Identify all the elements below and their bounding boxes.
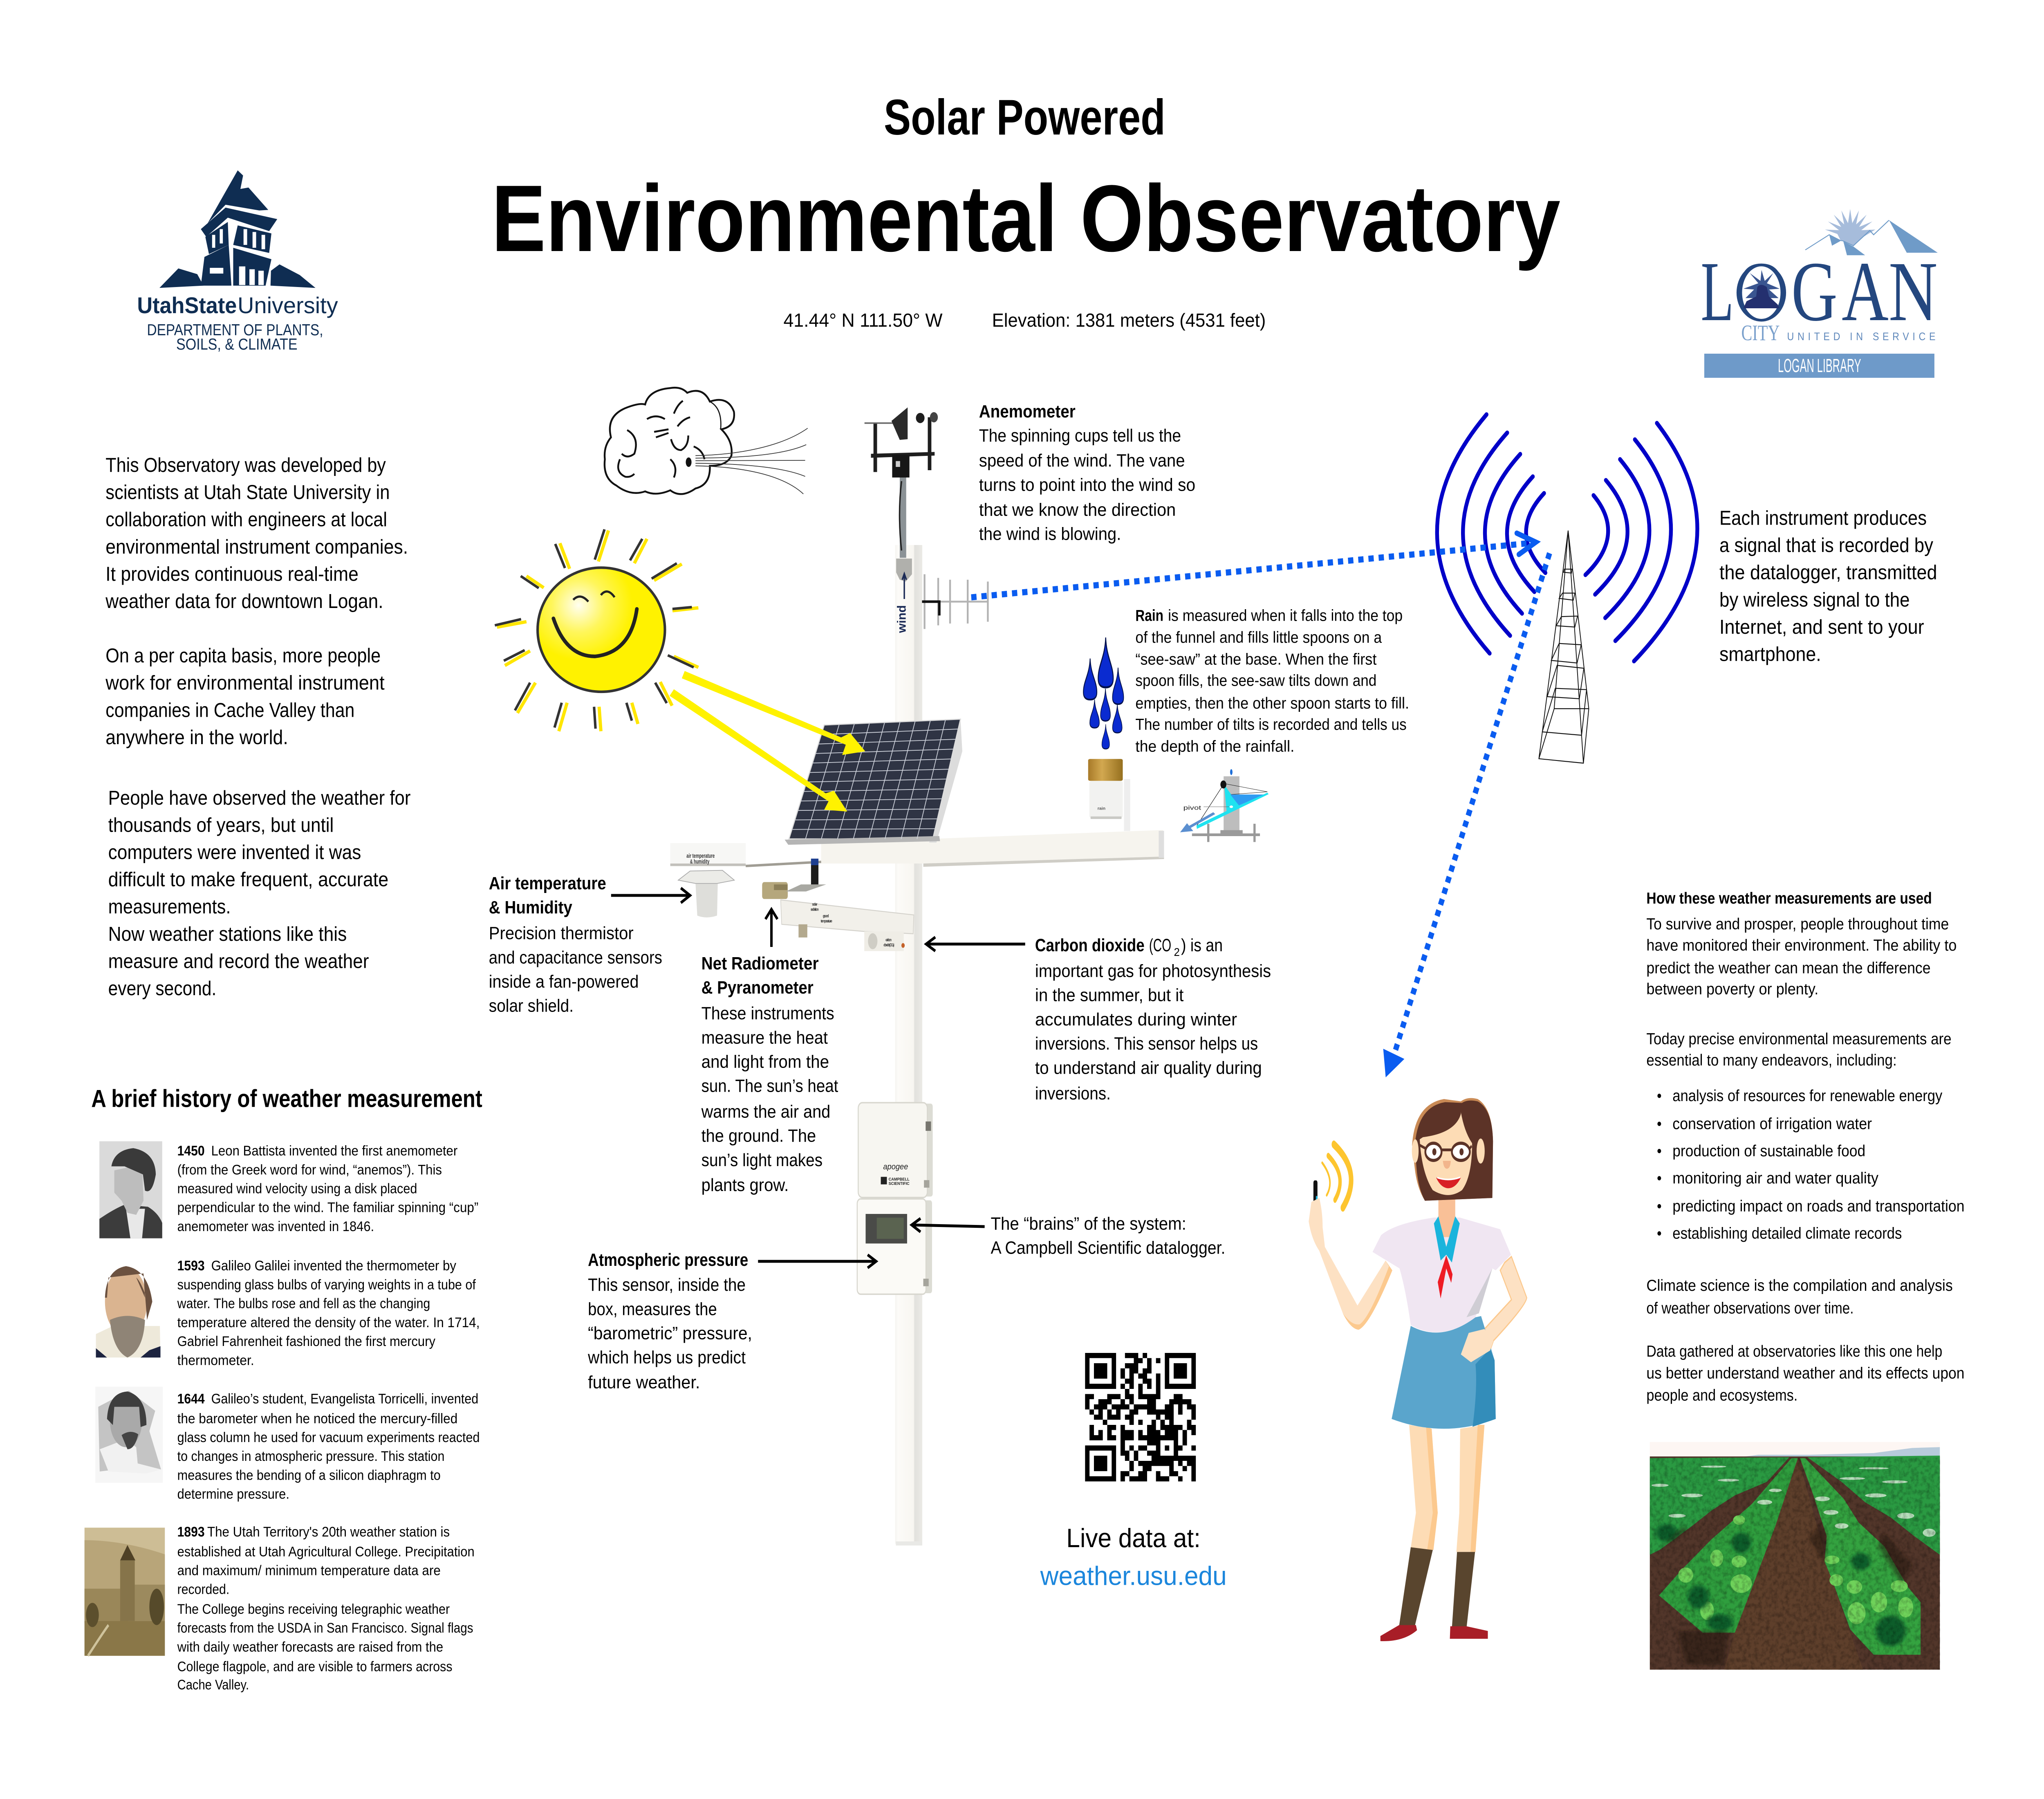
rain gauge: rain <box>1098 806 1105 811</box>
bulleted list: conservation of irrigation water <box>1672 1115 1872 1133</box>
label: anemometer: Anemometer <box>979 401 1076 422</box>
history entry 1644: to changes in atmospheric pressure. This station <box>177 1448 444 1464</box>
label: air temperature and humidity <box>489 873 662 1016</box>
history entry 1593: Gabriel Fahrenheit fashioned the first mercury <box>177 1333 435 1349</box>
icon: Old Main tower <box>159 170 316 288</box>
label: anemometer: speed of the wind. The vane <box>979 451 1185 471</box>
text block: climate science: of weather observations over time. <box>1646 1299 1853 1317</box>
bulleted list: predicting impact on roads and transportation <box>1672 1197 1965 1215</box>
history entry 1893: College flagpole, and are visible to farmers across <box>177 1658 453 1674</box>
label: rain: is measured when it falls into the top <box>1168 606 1403 624</box>
label: carbon dioxide: ) is an <box>1181 935 1223 955</box>
figure: girl with smartphone <box>1309 1098 1527 1641</box>
bulleted list: analysis of resources for renewable energy <box>1672 1087 1943 1104</box>
text block: observing the weather: every second. <box>108 977 216 1000</box>
portrait: Galileo <box>96 1266 161 1357</box>
logo wordmark LOGAN <box>1701 245 1938 339</box>
coordinates and elevation: Elevation: 1381 meters (4531 feet) <box>992 310 1266 331</box>
arrows: sunlight to panel <box>670 671 865 812</box>
enclosures <box>857 1103 933 1294</box>
logo text CITY: CITY <box>1741 321 1780 345</box>
label: signal explanation <box>1719 507 1937 665</box>
label: net radiometer and pyranometer: plants grow. <box>702 1175 789 1195</box>
live data link <box>1040 1523 1227 1590</box>
dotted arrow: tower to phone <box>1383 553 1550 1077</box>
bulleted list: • <box>1657 1087 1662 1104</box>
logo wordmark LOGAN: O <box>1737 245 1786 339</box>
callout arrows <box>611 888 1025 1268</box>
label: anemometer: that we know the direction <box>979 500 1176 520</box>
label: carbon dioxide: (CO <box>1149 935 1171 955</box>
phone signal waves <box>1322 1144 1351 1208</box>
anemometer and wind vane <box>865 407 938 581</box>
label: signal explanation: a signal that is recorded by <box>1719 534 1933 556</box>
net radiometer and pyranometer <box>762 859 914 938</box>
history entry 1450 <box>177 1143 478 1234</box>
text block: climate science: people and ecosystems. <box>1646 1386 1797 1404</box>
history entry 1644: glass column he used for vacuum experiments reacted <box>177 1429 480 1445</box>
arrow: datalogger <box>912 1218 985 1232</box>
text block: observatory intro <box>105 454 408 749</box>
history entry 1893: with daily weather forecasts are raised from the <box>177 1639 443 1655</box>
history entry 1893: recorded. <box>177 1581 229 1597</box>
text block: how measurements are used: essential to many endeavors, including: <box>1646 1051 1897 1069</box>
live data link: weather.usu.edu <box>1040 1561 1227 1590</box>
label: net radiometer and pyranometer: warms the air and <box>701 1101 830 1122</box>
label: wind on pole <box>895 574 908 633</box>
label: rain: the depth of the rainfall. <box>1135 737 1294 755</box>
portrait: Leon Battista <box>99 1141 162 1238</box>
bulleted list: • <box>1657 1142 1662 1160</box>
icon: blowing cloud <box>605 388 808 494</box>
label: atmospheric pressure: future weather. <box>588 1372 700 1392</box>
bulleted list: • <box>1657 1197 1662 1215</box>
icon: mountains and sun <box>1805 209 1938 255</box>
photo: crop field <box>1650 1442 1940 1670</box>
logo wordmark: UtahState <box>137 293 237 319</box>
live data link: Live data at: <box>1066 1523 1201 1553</box>
lower enclosure <box>857 1199 932 1294</box>
history entry 1644: 1644 <box>177 1391 205 1406</box>
bulleted list: • <box>1657 1224 1662 1242</box>
air temperature sensor <box>678 870 734 917</box>
upper enclosure: CAMPBELL <box>889 1177 910 1182</box>
label: net radiometer and pyranometer: Net Radiometer <box>702 953 819 974</box>
net radiometer and pyranometer: ground <box>823 913 829 918</box>
logo wordmark LOGAN: G <box>1791 245 1838 339</box>
bulleted list: • <box>1657 1115 1662 1133</box>
text block: observing the weather: thousands of years, but until <box>108 814 334 836</box>
bulleted list: establishing detailed climate records <box>1672 1224 1902 1242</box>
history entry 1644: Galileo’s student, Evangelista Torricelli, invented <box>211 1391 478 1406</box>
text block: observatory intro: This Observatory was developed by <box>105 454 386 476</box>
label: air temperature and humidity: and capacitance sensors <box>489 947 662 967</box>
label: atmospheric pressure: “barometric” pressure, <box>588 1323 752 1343</box>
label: rain: of the funnel and fills little spoons on a <box>1135 628 1382 646</box>
text block: observatory intro: work for environmental instrument <box>105 672 385 694</box>
history entry 1893: Cache Valley. <box>177 1677 249 1692</box>
text block: observing the weather: measurements. <box>108 895 231 918</box>
tipping bucket diagram: pivot <box>1183 804 1201 811</box>
text block: observing the weather: People have observed the weather for <box>108 787 410 809</box>
bulleted list: production of sustainable food <box>1672 1142 1865 1160</box>
label: carbon dioxide: to understand air quality during <box>1035 1058 1262 1078</box>
label: datalogger: A Campbell Scientific datalogger. <box>991 1238 1225 1258</box>
text block: observing the weather: measure and record the weather <box>108 950 369 972</box>
logo library bar: LOGAN LIBRARY <box>1778 355 1861 377</box>
logo wordmark <box>137 293 338 353</box>
bulleted list <box>1657 1087 1965 1242</box>
text block: observatory intro: anywhere in the world. <box>105 726 288 749</box>
arrow: net radiometer <box>765 909 778 947</box>
antenna <box>922 574 988 629</box>
text block: how measurements are used: Today precise environmental measurements are <box>1646 1030 1952 1048</box>
label: net radiometer and pyranometer: measure the heat <box>702 1027 828 1048</box>
net radiometer and pyranometer: solar <box>812 902 818 906</box>
net radiometer and pyranometer: radiation <box>811 907 819 912</box>
portrait: Torricelli <box>95 1386 163 1483</box>
text block: observing the weather: Now weather stations like this <box>108 923 347 945</box>
label: atmospheric pressure: This sensor, inside the <box>588 1274 746 1295</box>
carbon dioxide sensor: carbon <box>885 938 892 942</box>
label: rain: Rain <box>1135 606 1163 624</box>
USU logo <box>137 170 338 353</box>
upper enclosure: apogee <box>883 1162 908 1171</box>
logo wordmark LOGAN: L <box>1701 245 1734 339</box>
icon: radio tower <box>1437 415 1697 763</box>
label: anemometer <box>979 401 1195 544</box>
history entry 1593: 1593 <box>177 1258 205 1274</box>
title <box>491 90 1560 271</box>
label: atmospheric pressure <box>587 1249 752 1392</box>
icon: smiling sun <box>495 529 698 731</box>
logo text motto: UNITED IN SERVICE <box>1787 330 1935 343</box>
label: net radiometer and pyranometer: These instruments <box>702 1003 834 1023</box>
label: anemometer: The spinning cups tell us the <box>979 425 1181 446</box>
label: wind on pole: wind <box>895 605 908 633</box>
bulleted list: • <box>1657 1169 1662 1187</box>
text block: observatory intro: It provides continuous real-time <box>105 563 359 585</box>
coordinates and elevation <box>783 310 1266 331</box>
label: signal explanation: Each instrument produces <box>1719 507 1927 529</box>
phone <box>1313 1180 1318 1223</box>
label: signal explanation: smartphone. <box>1719 643 1821 665</box>
label: rain <box>1135 606 1409 755</box>
label: net radiometer and pyranometer: sun. The sun’s heat <box>702 1076 838 1096</box>
photo: Utah Agricultural College <box>85 1528 165 1656</box>
label: atmospheric pressure: Atmospheric pressure <box>588 1249 748 1270</box>
label: carbon dioxide: Carbon dioxide <box>1035 935 1145 955</box>
history entry 1593 <box>177 1258 480 1368</box>
title: Environmental Observatory <box>491 165 1560 271</box>
text block: observing the weather: difficult to make frequent, accurate <box>108 868 388 891</box>
history entry 1450: measured wind velocity using a disk placed <box>177 1180 417 1196</box>
signal arcs <box>1437 415 1697 661</box>
history entry 1893: The College begins receiving telegraphic weather <box>177 1601 450 1617</box>
label: rain: empties, then the other spoon starts to fill. <box>1135 694 1409 712</box>
text block: how measurements are used <box>1646 889 1957 1069</box>
arrow: atmospheric pressure <box>758 1255 876 1268</box>
arrow: air temperature <box>611 888 690 903</box>
bulleted list: monitoring air and water quality <box>1672 1169 1879 1187</box>
label: rain: “see-saw” at the base. When the first <box>1135 650 1376 668</box>
tipping bucket diagram <box>1180 769 1269 842</box>
label: anemometer: turns to point into the wind so <box>979 475 1195 495</box>
history entry 1644: the barometer when he noticed the mercury-filled <box>177 1411 457 1426</box>
label: signal explanation: the datalogger, transmitted <box>1719 561 1937 583</box>
logo wordmark LOGAN: N <box>1889 245 1938 339</box>
text block: climate science <box>1646 1276 1965 1404</box>
arrow: carbon dioxide <box>926 937 1025 951</box>
label: atmospheric pressure: which helps us predict <box>587 1347 746 1367</box>
history entry 1893: and maximum/ minimum temperature data are <box>177 1562 441 1578</box>
weather station pole <box>895 545 922 1546</box>
text block: how measurements are used: To survive and prosper, people throughout time <box>1646 915 1949 933</box>
logo wordmark: University <box>238 293 338 319</box>
text block: how measurements are used: predict the weather can mean the difference <box>1646 959 1931 977</box>
label: carbon dioxide: important gas for photosynthesis <box>1035 961 1271 981</box>
label: atmospheric pressure: box, measures the <box>588 1299 717 1319</box>
solar panel <box>784 719 962 845</box>
logo wordmark: SOILS, & CLIMATE <box>176 335 298 353</box>
label: anemometer: the wind is blowing. <box>979 524 1121 544</box>
upper enclosure: SCIENTIFIC <box>889 1181 910 1186</box>
crossarm <box>670 830 1164 867</box>
label: net radiometer and pyranometer: the ground. The <box>702 1126 816 1146</box>
icon: reader in O <box>1737 264 1786 322</box>
text block: observatory intro: weather data for downtown Logan. <box>105 590 383 612</box>
logo wordmark: DEPARTMENT OF PLANTS, <box>147 321 323 339</box>
hair and face <box>1412 1098 1493 1201</box>
Logan City logo <box>1701 209 1938 378</box>
history entry 1893: 1893 <box>177 1524 205 1540</box>
history entry 1593: thermometer. <box>177 1352 254 1368</box>
label: carbon dioxide: 2 <box>1174 946 1180 958</box>
icon: rain drops <box>1083 637 1124 749</box>
label: air temperature and humidity: inside a fan-powered <box>489 971 639 991</box>
history entry 1644: determine pressure. <box>177 1486 289 1502</box>
history entry 1450: (from the Greek word for wind, “anemos”). This <box>177 1162 442 1178</box>
label: air temperature and humidity: Precision thermistor <box>489 923 634 943</box>
text block: observatory intro: On a per capita basis, more people <box>105 644 381 667</box>
history entry 1450: perpendicular to the wind. The familiar spinning “cup” <box>177 1200 478 1215</box>
text block: observing the weather: computers were invented it was <box>108 841 361 864</box>
history entry 1893 <box>177 1524 475 1692</box>
history entry 1450: Leon Battista invented the first anemometer <box>211 1143 458 1159</box>
crossarm: & humidity <box>690 858 709 865</box>
label: air temperature and humidity: Air temperature <box>489 873 606 893</box>
label: carbon dioxide: inversions. This sensor helps us <box>1035 1033 1258 1054</box>
label: net radiometer and pyranometer: and light from the <box>702 1052 829 1072</box>
history entry 1644 <box>177 1391 480 1502</box>
text block: climate science: Data gathered at observatories like this one help <box>1646 1342 1942 1360</box>
label: net radiometer and pyranometer: sun’s light makes <box>702 1150 823 1170</box>
text block: observatory intro: environmental instrument companies. <box>105 536 408 558</box>
label: carbon dioxide: inversions. <box>1035 1083 1111 1104</box>
coordinates and elevation: 41.44° N 111.50° W <box>783 310 943 331</box>
label: carbon dioxide: accumulates during winter <box>1035 1009 1237 1030</box>
text block: observatory intro: collaboration with engineers at local <box>105 508 387 531</box>
history entry 1593: Galileo Galilei invented the thermometer by <box>211 1258 456 1274</box>
history entry 1893: established at Utah Agricultural College. Precipitation <box>177 1543 475 1559</box>
text block: how measurements are used: between poverty or plenty. <box>1646 980 1818 998</box>
history entry 1593: suspending glass bulbs of varying weights in a tube of <box>177 1276 476 1292</box>
dotted arrow: station to tower <box>971 533 1536 597</box>
history entry 1893: The Utah Territory's 20th weather station is <box>207 1524 450 1540</box>
carbon dioxide sensor <box>864 931 905 951</box>
rain gauge <box>1088 759 1130 831</box>
logo library bar <box>1704 354 1934 378</box>
history entry 1450: 1450 <box>177 1143 205 1159</box>
tower frame <box>1539 531 1589 763</box>
history entry 1893: forecasts from the USDA in San Francisco. Signal flags <box>177 1620 473 1636</box>
net radiometer and pyranometer: temperature <box>821 919 832 923</box>
label: carbon dioxide: in the summer, but it <box>1035 985 1184 1005</box>
history entry 1593: temperature altered the density of the water. In 1714, <box>177 1314 480 1330</box>
text block: climate science: us better understand weather and its effects upon <box>1646 1364 1965 1382</box>
label: rain: spoon fills, the see-saw tilts down and <box>1135 671 1376 689</box>
label: net radiometer and pyranometer <box>701 953 838 1195</box>
label: carbon dioxide <box>1035 935 1271 1104</box>
label: air temperature and humidity: & Humidity <box>489 897 572 917</box>
logo wordmark LOGAN: A <box>1842 245 1889 339</box>
text block: how measurements are used: have monitored their environment. The ability to <box>1646 936 1957 954</box>
carbon dioxide sensor: dioxide (CO₂) <box>883 942 894 947</box>
upper enclosure <box>858 1103 933 1198</box>
label: net radiometer and pyranometer: & Pyranometer <box>702 978 814 998</box>
text block: climate science: Climate science is the compilation and analysis <box>1646 1276 1953 1294</box>
history entry 1593: water. The bulbs rose and fell as the changing <box>177 1296 430 1311</box>
label: air temperature and humidity: solar shield. <box>489 996 574 1016</box>
label: datalogger <box>991 1214 1225 1258</box>
heading: brief history: A brief history of weather measurement <box>91 1085 482 1113</box>
text block: observatory intro: scientists at Utah State University in <box>105 481 390 503</box>
history entry 1644: measures the bending of a silicon diaphragm to <box>177 1467 441 1483</box>
title: Solar Powered <box>884 90 1165 146</box>
label: rain: The number of tilts is recorded and tells us <box>1135 715 1407 733</box>
crossarm: air temperature <box>686 852 715 859</box>
label: datalogger: The “brains” of the system: <box>991 1214 1186 1234</box>
QR code <box>1085 1353 1196 1481</box>
photo texture <box>1650 1458 1940 1670</box>
text block: how measurements are used: How these weather measurements are used <box>1646 889 1932 907</box>
label: signal explanation: by wireless signal to the <box>1719 588 1910 611</box>
history entry 1450: anemometer was invented in 1846. <box>177 1218 374 1234</box>
text block: observatory intro: companies in Cache Valley than <box>105 699 354 721</box>
label: signal explanation: Internet, and sent to your <box>1719 616 1924 638</box>
text block: observing the weather <box>108 787 410 1000</box>
